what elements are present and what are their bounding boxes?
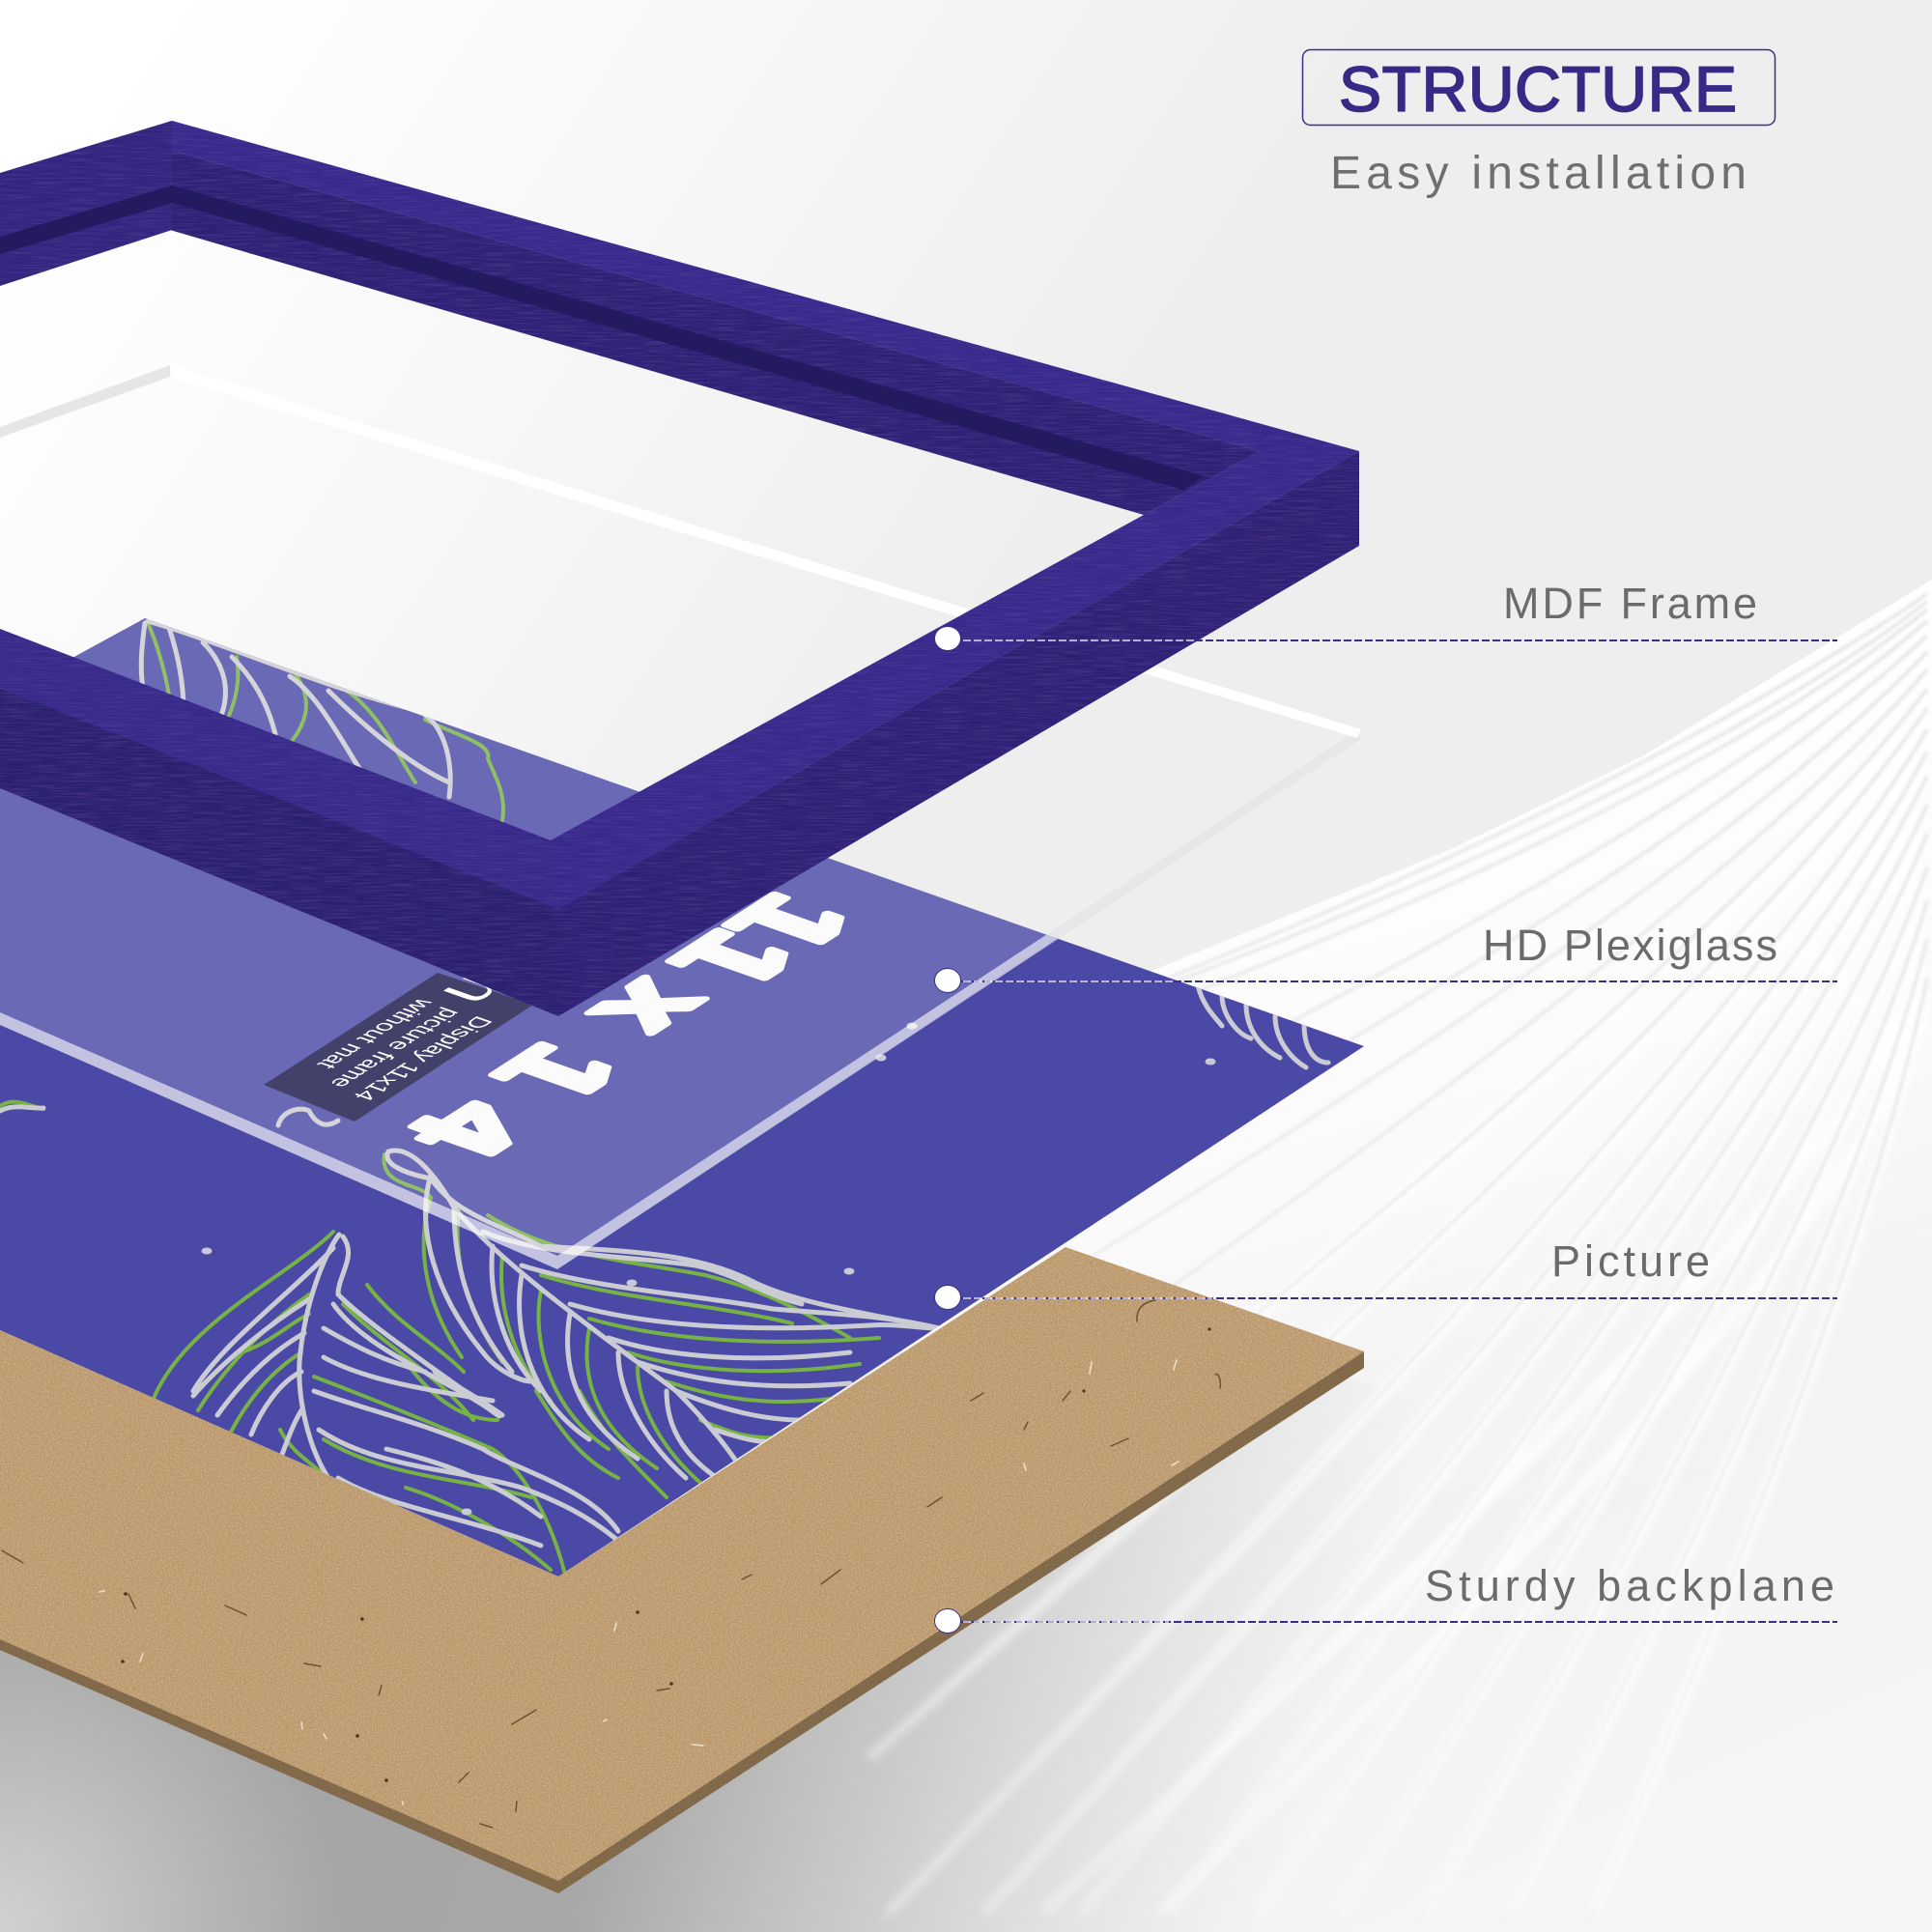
title box	[1302, 50, 1776, 126]
print dots	[201, 1022, 1215, 1515]
frame right bar side	[558, 451, 1359, 1016]
MDF frame	[0, 121, 1359, 1016]
callout: Picture: Picture	[1551, 1236, 1710, 1286]
backboard face	[0, 1247, 1364, 1881]
callout: MDF Frame: MDF Frame	[1503, 579, 1757, 628]
leaf illustrations	[0, 621, 1328, 1575]
leaves green strokes	[0, 623, 879, 1575]
callout: HD Plexiglass	[935, 921, 1837, 993]
picture label text: picture frame	[324, 1006, 468, 1091]
title text: STRUCTURE	[1339, 53, 1737, 125]
backboard edge	[0, 1351, 1364, 1893]
picture sheet	[0, 618, 1364, 1577]
callout: Picture	[935, 1236, 1837, 1310]
frame back-right groove	[172, 185, 1205, 490]
partially hidden label letter: n	[426, 968, 528, 1013]
backboard light fibres	[99, 1360, 1179, 1804]
picture label text: without mat	[311, 995, 441, 1071]
frame front bar side	[0, 688, 558, 1016]
callout: HD Plexiglass: HD Plexiglass	[1483, 921, 1777, 970]
sturdy backboard	[0, 1247, 1364, 1893]
callout: MDF Frame	[935, 579, 1837, 651]
picture label panel	[264, 973, 533, 1122]
frame back-right top strip	[172, 121, 1359, 451]
backboard dark specks	[121, 1327, 1211, 1782]
board shadow	[0, 1377, 1546, 1932]
size text: 11x14	[379, 882, 884, 1169]
plexiglass sheet	[0, 618, 1059, 1269]
picture label text: Display 11x14	[347, 1013, 498, 1103]
frame right bar top	[551, 451, 1359, 909]
frame back-left groove	[0, 185, 172, 254]
leaves grey strokes	[0, 621, 1328, 1546]
frame front bar top	[0, 629, 558, 909]
picture print	[0, 618, 1364, 1577]
picture label text	[311, 995, 498, 1103]
callout: Sturdy backplane	[935, 1561, 1837, 1633]
subtitle: Easy installation	[1330, 148, 1747, 199]
backboard fibres	[2, 1300, 1220, 1828]
plexiglass edge behind the picture	[0, 365, 1361, 1269]
frame back-right bar	[170, 151, 1260, 515]
callout: Sturdy backplane: Sturdy backplane	[1425, 1561, 1834, 1610]
frame back-left bar	[0, 121, 172, 286]
background light rays	[869, 594, 1927, 1922]
